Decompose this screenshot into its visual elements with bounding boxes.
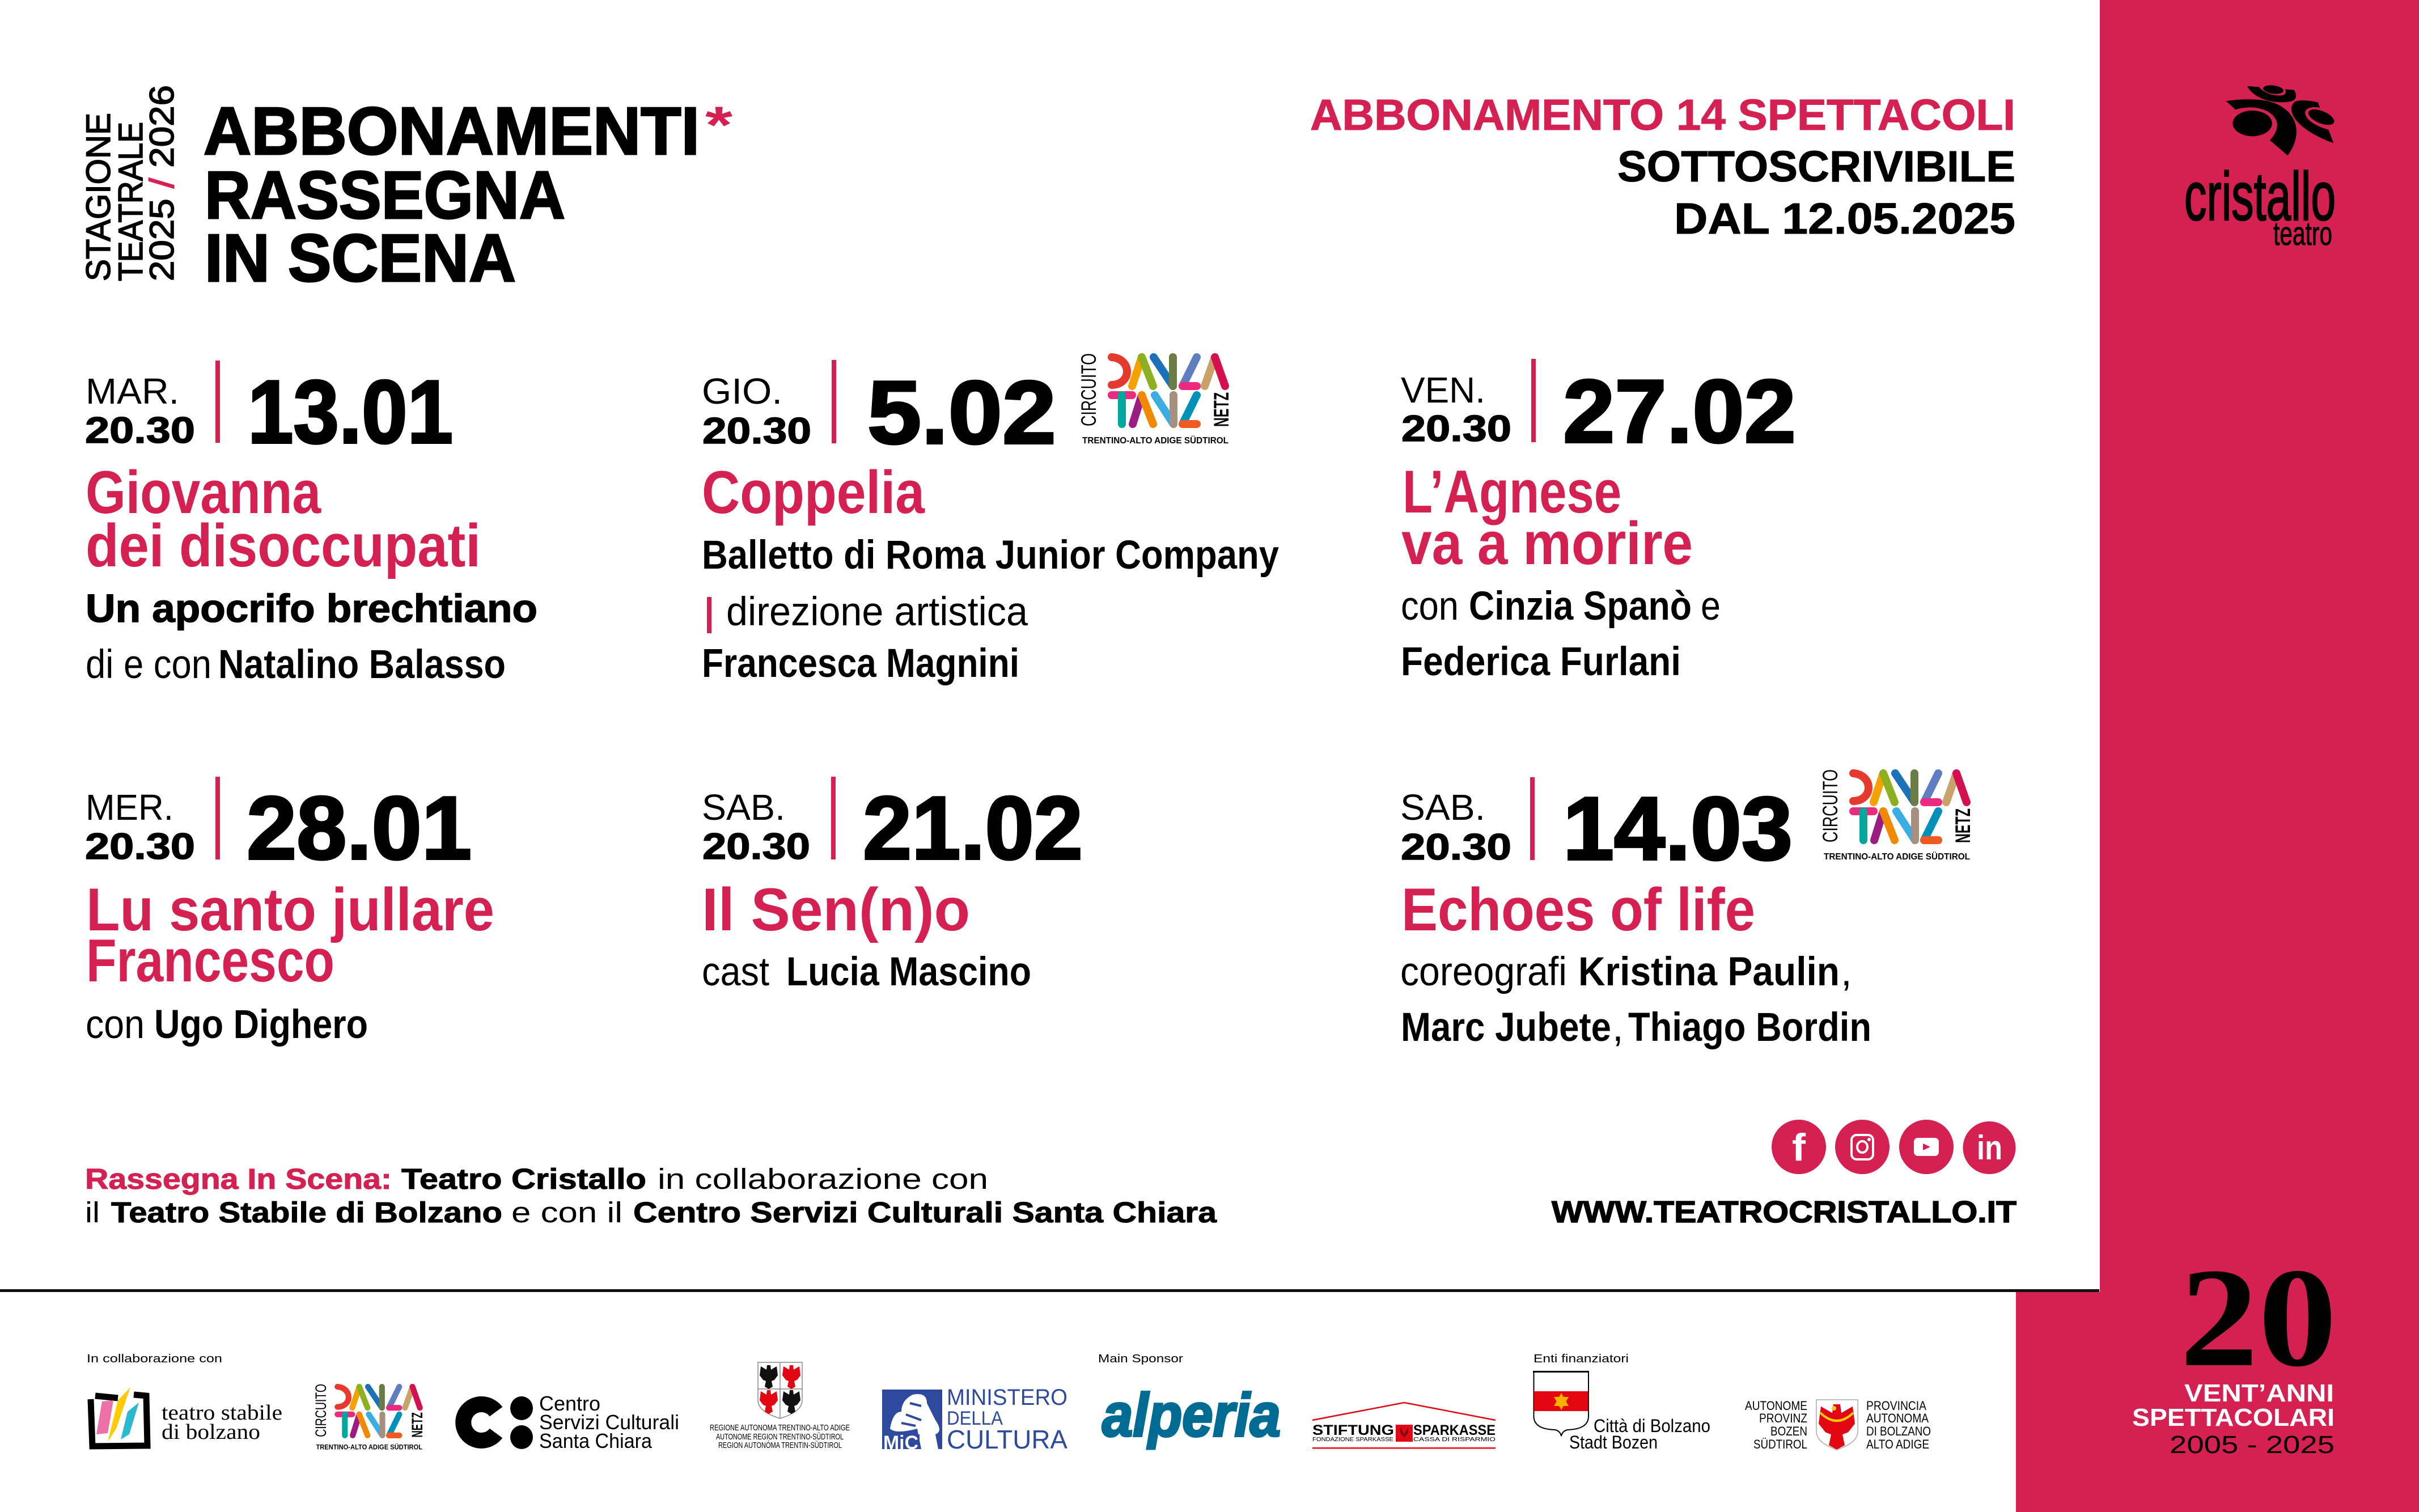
logo: circuito danza tanz <box>1819 769 1975 862</box>
date block: MAR. <box>86 371 179 412</box>
label: in collaborazione con: In collaborazione con <box>87 1353 222 1365</box>
icon: cristallo flower <box>2226 84 2337 155</box>
date block: SAB. <box>702 787 785 828</box>
logo: ministero della cultura: DELLA <box>947 1408 1003 1429</box>
title: * <box>705 96 732 154</box>
vertical season label: STAGIONE <box>79 113 117 281</box>
note: rassegna collaboration: Teatro Cristallo <box>401 1163 646 1195</box>
date block: 20.30 <box>702 825 810 867</box>
label: enti finanziatori: Enti finanziatori <box>1533 1353 1629 1365</box>
date block: 20.30 <box>1401 826 1511 867</box>
event: L'Agnese va a morire: va a morire <box>1401 509 1693 577</box>
event: Echoes of life: Thiago Bordin <box>1628 1005 1871 1050</box>
logo: circuito danza tanz: CIRCUITO <box>1077 353 1100 426</box>
note: rassegna collaboration: in collaborazione con <box>658 1163 988 1195</box>
date block <box>85 361 453 462</box>
date block: 13.01 <box>248 362 453 462</box>
event: L'Agnese va a morire: con <box>1401 584 1459 629</box>
logo: provincia autonoma di bolzano: ALTO ADIGE <box>1866 1437 1929 1451</box>
event: Giovanna dei disoccupati <box>85 361 537 687</box>
date block: 28.01 <box>247 778 472 878</box>
logo: circuito danza tanz <box>1077 353 1233 446</box>
logo: circuito danza tanz <box>312 1384 426 1451</box>
event: Coppelia: direzione artistica <box>726 590 1028 634</box>
event: Giovanna dei disoccupati: dei disoccupati <box>86 511 481 579</box>
logo: cristallo teatro: cristallo <box>2184 158 2336 235</box>
logo: provincia autonoma di bolzano: PROVINZ <box>1759 1411 1807 1425</box>
badge: 20 years: SPETTACOLARI <box>2132 1404 2335 1431</box>
social icons <box>1772 1120 2016 1174</box>
logo: centro servizi culturali santa chiara: Centro <box>539 1392 600 1415</box>
date block: 14.03 <box>1563 779 1793 879</box>
logo: città di bolzano <box>1533 1371 1710 1452</box>
subscription info: SOTTOSCRIVIBILE <box>1617 142 2015 191</box>
logo: provincia autonoma di bolzano: AUTONOME <box>1745 1399 1807 1413</box>
event: Il Sen(n)o: Il Sen(n)o <box>702 875 970 943</box>
date block: VEN. <box>1401 370 1485 410</box>
logo: circuito danza tanz: NETZ <box>409 1412 426 1438</box>
vertical season label <box>79 85 181 281</box>
title <box>204 94 732 296</box>
event: Echoes of life: Kristina Paulin <box>1578 950 1840 994</box>
subscription info: DAL 12.05.2025 <box>1674 194 2015 243</box>
date block: 21.02 <box>863 778 1083 878</box>
icon: linkedin: in <box>1977 1129 2002 1167</box>
date block: 20.30 <box>85 409 195 451</box>
logo: circuito danza tanz: CIRCUITO <box>1819 769 1842 842</box>
logo: teatro stabile di bolzano: teatro stabile <box>162 1401 282 1425</box>
logo: teatro stabile di bolzano <box>91 1387 282 1446</box>
event: Lu santo jullare Francesco: con <box>86 1002 145 1047</box>
title: IN SCENA <box>205 221 516 296</box>
event: Giovanna dei disoccupati: Natalino Balasso <box>218 642 506 687</box>
logo: ministero della cultura: CULTURA <box>947 1425 1067 1454</box>
date block: MER. <box>86 787 173 828</box>
event: Echoes of life: Marc Jubete <box>1401 1005 1611 1050</box>
date block <box>702 777 1083 878</box>
title: ABBONAMENTI <box>204 94 700 169</box>
date block: 27.02 <box>1563 362 1796 461</box>
event: Lu santo jullare Francesco <box>85 777 494 1047</box>
logo: ministero della cultura: MINISTERO <box>947 1385 1067 1410</box>
logo: provincia autonoma di bolzano: DI BOLZANO <box>1866 1424 1931 1438</box>
logo: regione trentino-alto adige <box>710 1362 850 1450</box>
date block: 20.30 <box>1401 408 1511 449</box>
date block <box>1400 777 1793 879</box>
event: Giovanna dei disoccupati: Giovanna <box>86 458 321 526</box>
label: main sponsor: Main Sponsor <box>1098 1353 1183 1365</box>
logo: provincia autonoma di bolzano: AUTONOMA <box>1866 1411 1929 1425</box>
logo: ministero della cultura: MiC <box>883 1432 918 1454</box>
logo: circuito danza tanz: CIRCUITO <box>312 1384 329 1437</box>
website url: WWW.TEATROCRISTALLO.IT <box>1552 1195 2016 1229</box>
icon: facebook: f <box>1792 1126 1806 1169</box>
logo: circuito danza tanz: NETZ <box>1951 808 1975 843</box>
logo: stiftung sparkasse: STIFTUNG <box>1312 1422 1394 1438</box>
date block: SAB. <box>1400 787 1485 828</box>
event: Il Sen(n)o <box>702 777 1083 994</box>
event: Coppelia: Balletto di Roma Junior Company <box>702 533 1279 578</box>
event: Lu santo jullare Francesco: Francesco <box>86 926 334 994</box>
badge: 20 years: 20 <box>2180 1239 2337 1396</box>
logo: alperia: alperia <box>1102 1380 1281 1449</box>
logo: circuito danza tanz: TRENTINO-ALTO ADIGE SÜDTIROL <box>1824 851 1970 862</box>
event: Giovanna dei disoccupati: Un apocrifo brechtiano <box>86 586 537 630</box>
date block: 20.30 <box>702 410 811 451</box>
note: rassegna collaboration: il <box>85 1196 100 1229</box>
logo: centro servizi culturali santa chiara: Santa Chiara <box>539 1429 653 1452</box>
event: Echoes of life: , <box>1841 950 1852 994</box>
logo: teatro stabile di bolzano: di bolzano <box>162 1420 260 1444</box>
icon: youtube <box>1899 1120 1954 1174</box>
icon: instagram <box>1835 1120 1890 1174</box>
event: L'Agnese va a morire: e <box>1701 584 1721 629</box>
logo: circuito danza tanz: TRENTINO-ALTO ADIGE SÜDTIROL <box>1082 435 1228 446</box>
date block: 20.30 <box>85 825 195 867</box>
event: L'Agnese va a morire: L’Agnese <box>1403 458 1621 526</box>
icon: facebook <box>1772 1120 1826 1174</box>
logo: ministero della cultura <box>882 1385 1067 1454</box>
event: L'Agnese va a morire: Federica Furlani <box>1401 639 1681 684</box>
note: rassegna collaboration: e con il <box>511 1196 622 1229</box>
logo: stiftung sparkasse: FONDAZIONE SPARKASSE <box>1312 1437 1393 1443</box>
badge: 20 years <box>2132 1239 2337 1459</box>
logo: provincia autonoma di bolzano <box>1745 1399 1931 1451</box>
event: Coppelia: Coppelia <box>702 458 925 526</box>
logo: regione trentino-alto adige: REGION AUTONÓMA TRENTIN-SÜDTIROL <box>718 1440 842 1450</box>
event: L'Agnese va a morire: Cinzia Spanò <box>1469 584 1692 629</box>
event: L'Agnese va a morire <box>1401 359 1796 684</box>
logo: stiftung sparkasse: SPARKASSE <box>1413 1422 1496 1438</box>
panel: magenta sidebar <box>2016 0 2419 1512</box>
note: rassegna collaboration: Centro Servizi Culturali Santa Chiara <box>633 1196 1217 1229</box>
logo: cristallo teatro <box>2184 84 2337 252</box>
logo: provincia autonoma di bolzano: SÜDTIROL <box>1753 1437 1807 1451</box>
event: Echoes of life: , <box>1612 1005 1624 1050</box>
date block <box>1401 359 1796 461</box>
event: Giovanna dei disoccupati: di e con <box>86 642 211 687</box>
subscription info <box>1310 91 2015 243</box>
logo: circuito danza tanz: TRENTINO-ALTO ADIGE SÜDTIROL <box>316 1444 422 1451</box>
event: Il Sen(n)o: cast <box>702 950 769 994</box>
logo: regione trentino-alto adige: AUTONOME REGION TRENTINO-SÜDTIROL <box>716 1431 844 1442</box>
title: RASSEGNA <box>205 158 565 233</box>
note: rassegna collaboration: Rassegna In Scena: <box>85 1163 392 1195</box>
event: Coppelia: Francesca Magnini <box>702 641 1019 686</box>
event: Coppelia <box>702 353 1279 686</box>
subscription info: ABBONAMENTO 14 SPETTACOLI <box>1310 91 2015 139</box>
vertical season label: 2025 / 2026 <box>143 85 181 281</box>
logo: provincia autonoma di bolzano: PROVINCIA <box>1866 1399 1926 1413</box>
logo: regione trentino-alto adige: REGIONE AUTONOMA TRENTINO-ALTO ADIGE <box>710 1423 850 1433</box>
event: Echoes of life <box>1400 769 1975 1050</box>
logo: cristallo teatro: teatro <box>2273 215 2332 252</box>
note: rassegna collaboration: Teatro Stabile di Bolzano <box>111 1196 502 1229</box>
event: Echoes of life: coreografi <box>1400 950 1567 994</box>
logo: provincia autonoma di bolzano: BOZEN <box>1770 1424 1807 1438</box>
logo: stiftung sparkasse <box>1312 1403 1496 1449</box>
badge: 20 years: VENT’ANNI <box>2184 1379 2334 1407</box>
icon: linkedin <box>1963 1121 2016 1174</box>
logo: città di bolzano: Città di Bolzano <box>1594 1416 1710 1436</box>
logo: centro servizi culturali santa chiara: Servizi Culturali <box>539 1411 679 1434</box>
date block: GIO. <box>702 371 782 412</box>
logo: città di bolzano: Stadt Bozen <box>1569 1432 1658 1452</box>
event: Lu santo jullare Francesco: Ugo Dighero <box>154 1002 368 1047</box>
note: rassegna collaboration <box>85 1163 1217 1229</box>
vertical season label: TEATRALE <box>112 122 150 281</box>
logo: circuito danza tanz: NETZ <box>1210 392 1233 427</box>
event: Il Sen(n)o: Lucia Mascino <box>786 950 1031 994</box>
date block <box>702 360 1056 463</box>
event: Echoes of life: Echoes of life <box>1401 875 1755 943</box>
date block: 5.02 <box>867 363 1056 463</box>
logo: stiftung sparkasse: CASSA DI RISPARMIO <box>1413 1437 1496 1443</box>
logo: centro servizi culturali santa chiara <box>463 1392 679 1452</box>
badge: 20 years: 2005 - 2025 <box>2170 1431 2335 1459</box>
date block <box>85 777 472 878</box>
event: Lu santo jullare Francesco: Lu santo jullare <box>86 875 494 943</box>
